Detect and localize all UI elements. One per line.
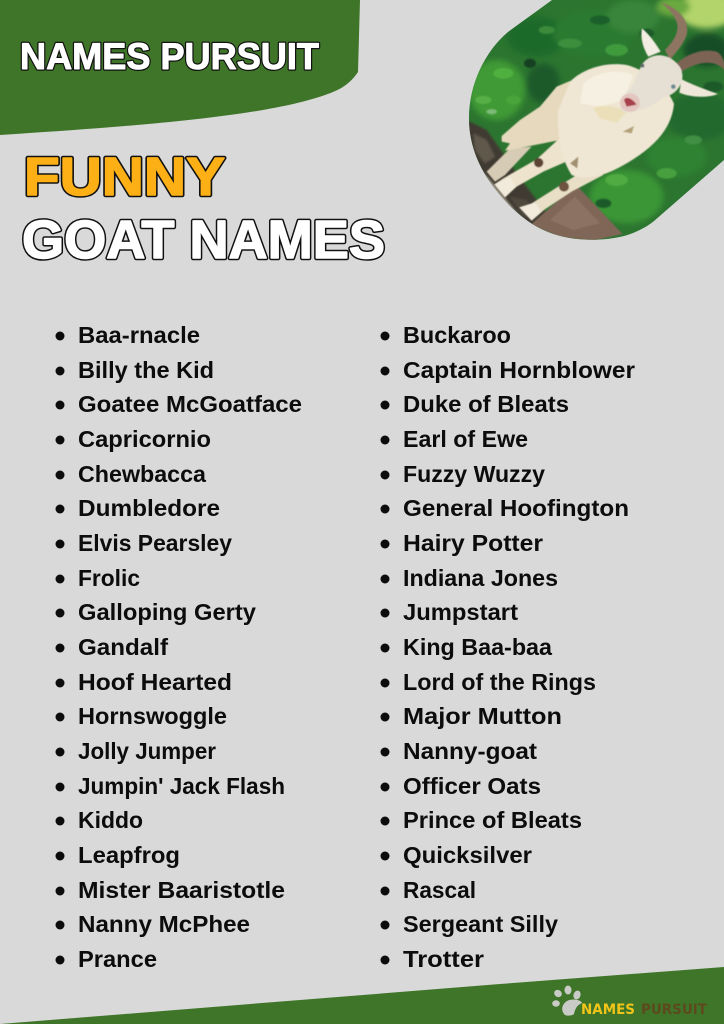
names list: left column: Capricornio bbox=[78, 426, 211, 452]
names list: left column bbox=[56, 322, 302, 972]
names list: right column: Hairy Potter bbox=[403, 530, 543, 556]
names list: left column: Prance bbox=[78, 946, 157, 972]
title line: funny: FUNNY bbox=[24, 147, 225, 207]
names list: left column: Jolly Jumper bbox=[78, 738, 216, 764]
names list: left column: Chewbacca bbox=[78, 461, 206, 487]
logo text: names: NAMES bbox=[581, 1002, 635, 1018]
names list: right column: Rascal bbox=[403, 877, 476, 903]
bullets bbox=[380, 332, 390, 964]
names list: left column: Goatee McGoatface bbox=[78, 391, 302, 417]
icon: paw print bbox=[552, 986, 582, 1016]
names list: left column: Kiddo bbox=[78, 807, 143, 833]
names list: right column: Quicksilver bbox=[403, 842, 532, 868]
title line: funny: FUNNY bbox=[24, 147, 225, 207]
body bbox=[558, 64, 674, 178]
names list: left column: Baa-rnacle bbox=[78, 322, 200, 348]
names list: right column: King Baa-baa bbox=[403, 634, 552, 660]
names list: right column: Nanny-goat bbox=[403, 738, 537, 764]
ears bbox=[641, 28, 661, 57]
names list: right column: Captain Hornblower bbox=[403, 357, 635, 383]
rock bbox=[531, 184, 623, 241]
foliage bbox=[468, 0, 724, 223]
title line: goat names: GOAT NAMES bbox=[22, 210, 385, 270]
names list: right column: Lord of the Rings bbox=[403, 669, 596, 695]
tree trunk bbox=[467, 120, 547, 227]
names list: right column: General Hoofington bbox=[403, 495, 629, 521]
names list: right column: Jumpstart bbox=[403, 599, 518, 625]
names list: right column: Indiana Jones bbox=[403, 565, 558, 591]
names list: right column: Prince of Bleats bbox=[403, 807, 582, 833]
hind leg bbox=[487, 147, 532, 182]
names list: right column bbox=[380, 322, 635, 972]
names list: right column: Fuzzy Wuzzy bbox=[403, 461, 545, 487]
horns bbox=[661, 3, 687, 60]
footer banner bbox=[0, 967, 724, 1024]
logo bbox=[552, 986, 707, 1018]
names list: right column: Buckaroo bbox=[403, 322, 511, 348]
head bbox=[620, 55, 682, 112]
front legs bbox=[494, 139, 566, 198]
title bbox=[22, 147, 385, 270]
names list: left column: Frolic bbox=[78, 565, 140, 591]
brand name: NAMES PURSUIT bbox=[20, 36, 319, 77]
names list: left column: Nanny McPhee bbox=[78, 911, 250, 937]
header banner bbox=[0, 0, 360, 135]
title line: goat names: GOAT NAMES bbox=[22, 210, 385, 270]
names list: right column: Earl of Ewe bbox=[403, 426, 528, 452]
names list: left column: Hornswoggle bbox=[78, 703, 227, 729]
beard bbox=[593, 106, 627, 123]
names list: left column: Gandalf bbox=[78, 634, 168, 660]
names list: left column: Mister Baaristotle bbox=[78, 877, 285, 903]
shaggy hind fur bbox=[500, 80, 571, 152]
photo: goat on a rock bbox=[460, 0, 724, 250]
bullets bbox=[56, 332, 64, 964]
brand name: NAMES PURSUIT bbox=[20, 36, 319, 77]
names list: right column: Sergeant Silly bbox=[403, 911, 558, 937]
names list: left column: Dumbledore bbox=[78, 495, 220, 521]
names list: left column: Hoof Hearted bbox=[78, 669, 232, 695]
names list: left column: Leapfrog bbox=[78, 842, 180, 868]
muzzle bbox=[620, 93, 640, 112]
names list: right column: Trotter bbox=[403, 946, 484, 972]
logo text: pursuit: PURSUIT bbox=[641, 1002, 707, 1018]
eyes bbox=[671, 84, 676, 89]
names list: left column: Jumpin' Jack Flash bbox=[78, 773, 285, 799]
names list: right column: Major Mutton bbox=[403, 703, 562, 729]
names list: left column: Elvis Pearsley bbox=[78, 530, 232, 556]
names list: right column: Officer Oats bbox=[403, 773, 541, 799]
names list: left column: Billy the Kid bbox=[78, 357, 214, 383]
goat bbox=[487, 3, 724, 221]
names list: right column: Duke of Bleats bbox=[403, 391, 569, 417]
knees and marks bbox=[534, 158, 543, 167]
hooves bbox=[494, 177, 516, 197]
names list: left column: Galloping Gerty bbox=[78, 599, 256, 625]
